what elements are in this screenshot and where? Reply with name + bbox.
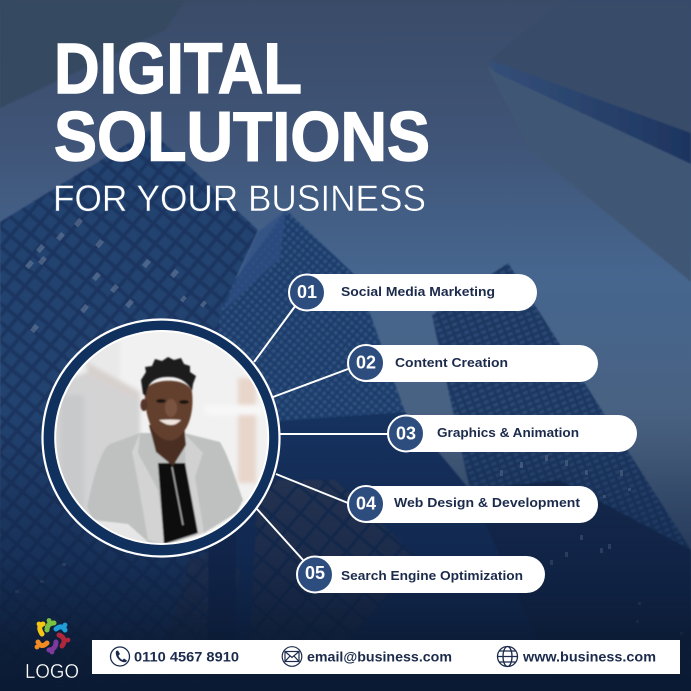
jacket [87,433,243,545]
icon: globe [498,646,518,666]
contact bar [92,640,680,674]
white fold at lower left [96,520,148,542]
lapels [132,433,165,545]
item 02: Content Creation [348,345,598,382]
item 03: Graphics & Animation: 03 [396,424,416,444]
icon: phone [110,647,130,666]
website: www.business.com [522,650,656,664]
email address: email@business.com [307,650,452,664]
item 04: Web Design & Development: 04 [356,494,376,514]
item 05: Search Engine Optimization: 05 [305,563,325,583]
hair [141,357,196,396]
title: DIGITAL [54,30,302,109]
lit windows [15,218,683,635]
item 05: Search Engine Optimization: Search Engine Optimization [341,568,523,583]
neck [149,425,186,466]
logo [25,618,79,683]
black top [158,463,198,544]
face [145,381,192,440]
item 04: Web Design & Development: Web Design & Development [394,495,581,510]
portrait photo [56,332,267,543]
phone number: 0110 4567 8910 [134,650,239,664]
item 01: Social Media Marketing [289,274,537,311]
item 02: Content Creation: 02 [356,352,376,372]
title [53,30,430,219]
logo: LOGO [25,661,79,683]
item 03: Graphics & Animation [388,415,637,452]
zipper [172,467,183,525]
item 05: Search Engine Optimization [297,556,545,593]
item 02: Content Creation: Content Creation [395,355,508,370]
item 01: Social Media Marketing: Social Media Marketing [341,284,495,299]
icon: logo pinwheel of people [35,618,70,654]
eyes and smile [156,399,166,403]
item 04: Web Design & Development [348,486,598,523]
icon: email [282,647,302,666]
connector lines [254,305,388,560]
item 01: Social Media Marketing: 01 [297,282,317,302]
portrait medallion [42,320,280,556]
title: SOLUTIONS [54,98,430,176]
item 03: Graphics & Animation: Graphics & Animation [437,425,579,440]
title: FOR YOUR BUSINESS [53,178,426,219]
